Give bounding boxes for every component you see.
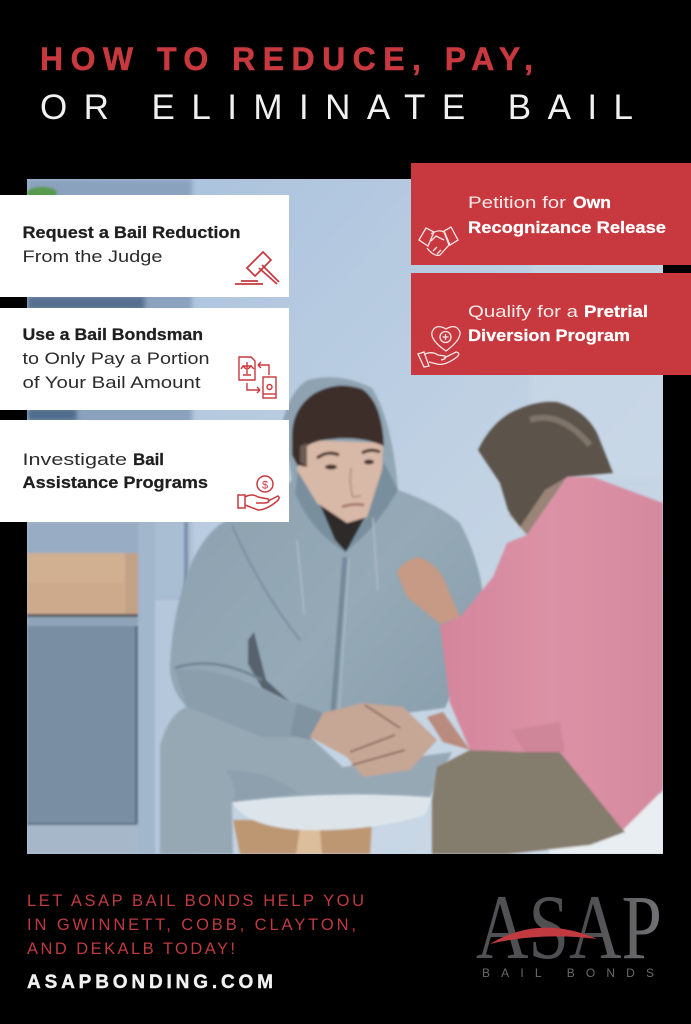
title: HOW TO REDUCE, PAY, — [40, 41, 533, 77]
card: use a bail bondsman: of Your Bail Amount — [22, 374, 201, 392]
stool — [232, 793, 432, 854]
card: investigate bail assistance programs — [0, 420, 289, 522]
card: own recognizance release: Petition for — [468, 194, 567, 212]
card: request a bail reduction — [0, 195, 289, 297]
card: own recognizance release: Recognizance Release — [468, 219, 666, 237]
card: pretrial diversion program: Pretrial — [584, 303, 648, 321]
logo: ASAP Bail Bonds: BAIL BONDS — [482, 966, 654, 980]
icon: gavel — [235, 252, 279, 284]
footer call to action: IN GWINNETT, COBB, CLAYTON, — [27, 916, 356, 934]
card: request a bail reduction: Request a Bail Reduction — [22, 224, 241, 242]
photo: counselor talking with young man in hoodie — [27, 179, 663, 855]
card: pretrial diversion program — [411, 273, 691, 375]
title: OR ELIMINATE BAIL — [40, 88, 633, 127]
icon: hand holding coin: $ — [262, 480, 268, 492]
card: use a bail bondsman: to Only Pay a Portion — [22, 350, 210, 368]
man in pink shirt — [397, 402, 663, 854]
footer call to action: AND DEKALB TODAY! — [27, 940, 235, 958]
card: investigate bail assistance programs: Investigate — [22, 451, 127, 469]
card: pretrial diversion program: Diversion Program — [468, 327, 630, 345]
icon: hand holding coin — [238, 476, 279, 510]
footer call to action — [27, 892, 364, 993]
icon: hand holding heart — [418, 327, 460, 367]
card: request a bail reduction: From the Judge — [22, 248, 162, 266]
card: pretrial diversion program: Qualify for a — [468, 303, 579, 321]
head of young man — [292, 386, 384, 523]
clasped hands — [310, 703, 437, 777]
icon: document and money exchange — [239, 357, 276, 398]
man in gray hoodie — [160, 377, 485, 854]
icon: handshake — [419, 227, 458, 255]
card: investigate bail assistance programs: Bail — [133, 451, 164, 469]
card: own recognizance release — [411, 163, 691, 265]
card: own recognizance release: Own — [573, 194, 611, 212]
card: investigate bail assistance programs: Assistance Programs — [22, 474, 208, 492]
footer call to action: LET ASAP BAIL BONDS HELP YOU — [27, 892, 364, 910]
card: use a bail bondsman — [0, 308, 289, 410]
title — [40, 41, 633, 127]
footer call to action: ASAPBONDING.COM — [27, 972, 273, 993]
card: use a bail bondsman: Use a Bail Bondsman — [22, 326, 203, 344]
